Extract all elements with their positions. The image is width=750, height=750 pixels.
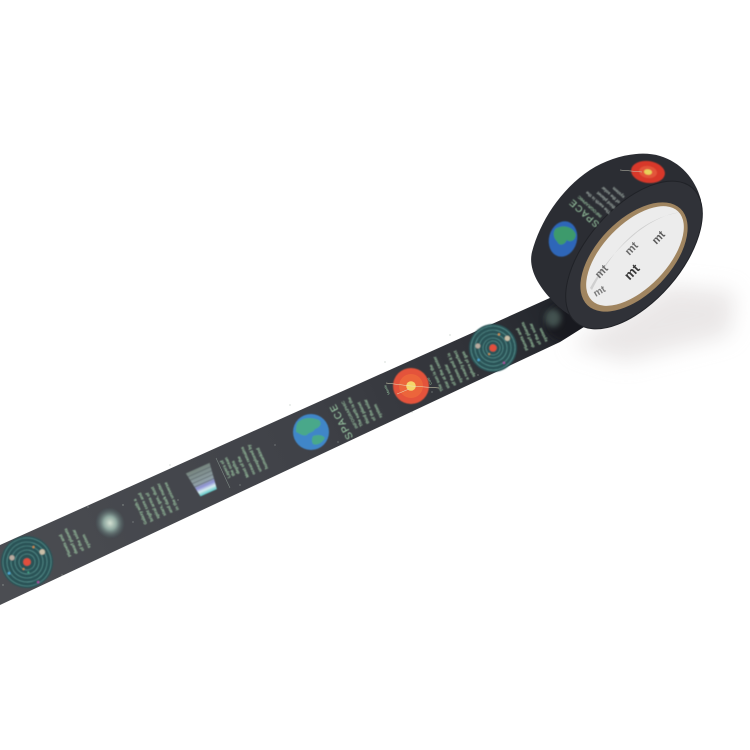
- core inner white with mt logos: mt: [592, 284, 608, 300]
- text block: galaxy: in the universe: [163, 481, 180, 511]
- tape strip: [0, 297, 612, 605]
- text block: ocean: Most of the: [236, 455, 250, 478]
- text block: ocean: humankind: [255, 447, 269, 470]
- core inner white with mt logos: [569, 189, 701, 323]
- core inner white with mt logos: mt: [623, 240, 641, 258]
- text block: planets: system: [81, 533, 92, 549]
- roll front face: [540, 157, 728, 353]
- text block: sun: star at the center: [432, 355, 451, 389]
- text block: galaxy: Galaxy with a: [132, 498, 148, 525]
- text block: layers label: the ocean: [223, 456, 236, 477]
- photo: washi tape roll: [0, 154, 737, 605]
- text block: galaxy: stars, gas, dust: [150, 485, 167, 517]
- text block: earth: of the solar: [363, 398, 377, 422]
- text block: earth: third planet: [356, 401, 370, 425]
- title: SPACE infographic: SPACE: [328, 401, 356, 441]
- roll text block: [584, 174, 626, 215]
- text block: planets: dwarf planets: [63, 527, 79, 555]
- roll earth: [545, 218, 581, 260]
- icon: galaxy: [91, 504, 129, 542]
- text block: planets near roll: [513, 315, 549, 351]
- text block: planets: Planets and: [58, 533, 72, 558]
- text block: sun: [426, 344, 476, 392]
- text block: layers label: [219, 454, 241, 479]
- text block: earth: system: [373, 403, 383, 419]
- divider line: [216, 458, 230, 488]
- core inner white with mt logos: mt: [650, 229, 668, 247]
- roll text block: system: [611, 186, 626, 199]
- text block: planets: of the solar: [71, 528, 85, 552]
- cardboard core ring: [561, 183, 707, 331]
- text block: galaxy: spiral arms of: [145, 491, 161, 520]
- text block: sun: of the solar: [443, 363, 457, 387]
- icon: earth: [293, 414, 329, 450]
- text block: sun: system and it is: [446, 352, 464, 384]
- title: SPACE infographic: INFOGRAPHIC: [340, 399, 359, 429]
- text block: earth: [346, 387, 383, 427]
- roll text block: third planet: [595, 190, 616, 210]
- roll sun: [630, 159, 666, 185]
- icon: solar system right: [461, 316, 525, 380]
- roll title SPACE: INFOGRAPHIC: [576, 194, 603, 219]
- text block: ocean: unexplored by: [246, 443, 263, 473]
- icon: solar system left: [0, 528, 61, 596]
- text block: ocean: [233, 440, 269, 478]
- icon: sun cross-section: Mantle: [383, 384, 391, 395]
- text block: sun: sphere of gas: [460, 350, 476, 378]
- roll shadow: [570, 285, 735, 362]
- roll text block: The earth is the: [584, 190, 612, 215]
- text block: planets near roll: of the solar: [528, 322, 542, 346]
- roll contact shade: [545, 306, 584, 343]
- text block: galaxy: bright core and: [137, 492, 154, 522]
- icon: sun cross-section: [383, 368, 439, 404]
- icon: sun cross-section: Core: [426, 377, 433, 385]
- text block: sun: The sun is the: [428, 363, 444, 392]
- core inner white with mt logos: mt: [593, 263, 611, 281]
- text block: planets near roll: Planets and: [515, 327, 529, 351]
- text block: galaxy: and dark matter: [156, 482, 174, 514]
- icon: galaxy near roll: [545, 309, 561, 327]
- text block: planets near roll: dwarf planets: [520, 321, 536, 348]
- roll text block: of the solar: [600, 185, 621, 205]
- text block: layers label: Layers of: [219, 459, 232, 479]
- text block: layers label: depths: [230, 459, 241, 475]
- roll edge highlight: [540, 157, 728, 353]
- icon: layered cup diagram: [186, 463, 221, 498]
- speckle stars: [2, 334, 479, 586]
- text block: galaxy: [130, 479, 180, 525]
- roll title SPACE: SPACE: [567, 196, 602, 229]
- text block: ocean: ocean remains: [239, 445, 256, 476]
- text block: earth: The earth is the: [346, 396, 364, 427]
- tape roll: [531, 154, 728, 353]
- text block: planets near roll: system: [538, 327, 549, 343]
- roll outer band: [531, 154, 701, 324]
- text block: sun: a nearly perfect: [452, 349, 470, 381]
- text block: planets: [56, 521, 92, 558]
- core inner white with mt logos: mt: [621, 260, 643, 283]
